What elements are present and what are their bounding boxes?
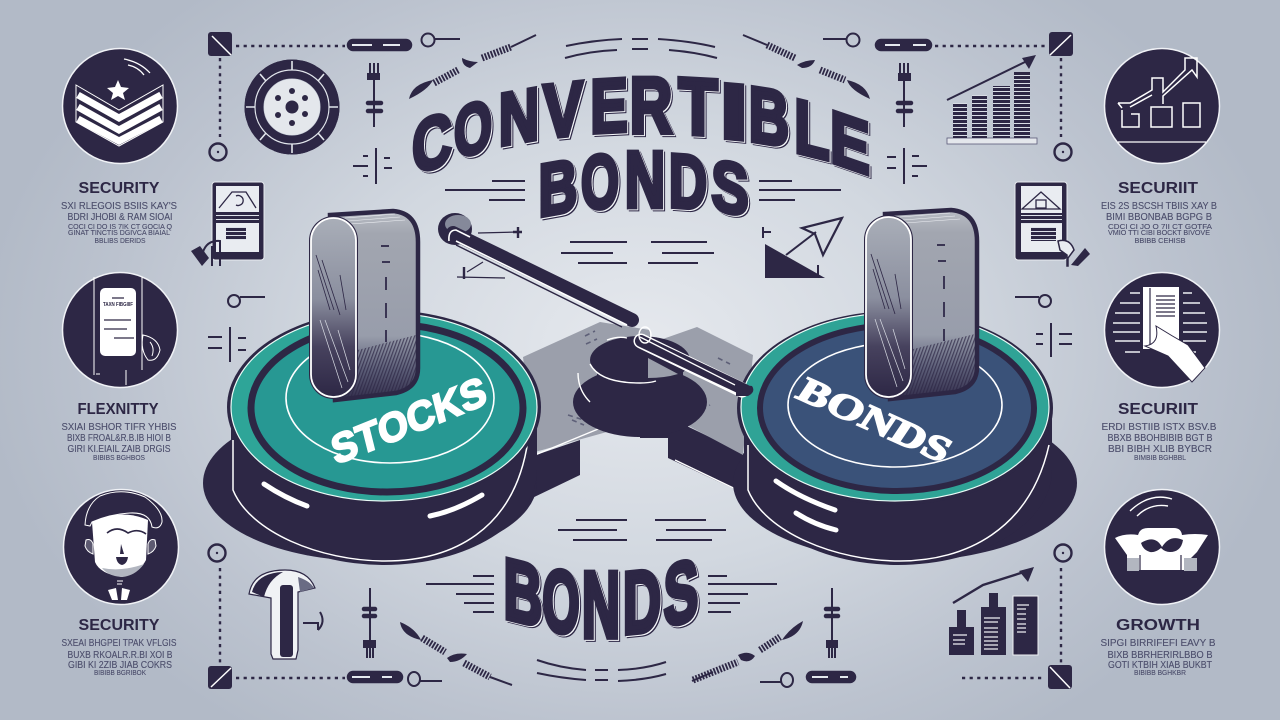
- label and text: left 2: SXIAI BSHOR TIFR YHBIS: [62, 422, 177, 433]
- title: CONVERTIBLE: L: [794, 84, 830, 177]
- capsule: right: [864, 210, 977, 399]
- badge: smiling person: [64, 490, 178, 604]
- tablet icon right: [1015, 182, 1090, 266]
- label and text: right 3: SIPGI BIRRIFEFI EAVY B: [1100, 638, 1216, 649]
- label and text: left 3: SXEAI BHGPEI TPAK VFLGIS: [62, 638, 177, 649]
- title: CONVERTIBLE: V: [543, 65, 583, 155]
- platform: bonds: [733, 311, 1077, 565]
- platform: stocks: [203, 310, 541, 565]
- label and text: left 2: FLEXNITTY: [78, 401, 159, 418]
- frame: dotted corners and connectors: [208, 32, 1073, 689]
- platform shadow: [203, 405, 537, 561]
- arrow on wedge icon: [763, 218, 842, 278]
- label and text: right 2: [1102, 401, 1217, 462]
- decorative ornaments: bars, pins, crosses: [208, 34, 1072, 687]
- label and text: right 2: BBXB BBOHBIBIB BGT B: [1108, 433, 1213, 444]
- title: BONDS: B: [539, 143, 577, 233]
- title: BONDS: N: [625, 134, 665, 225]
- label and text: right 3: GOTI KTBIH XIAB BUKBT: [1108, 660, 1212, 671]
- gear icon: [246, 60, 338, 154]
- label and text: left 1: BBLIBS DERIDS: [94, 236, 146, 245]
- bar chart top right: [947, 55, 1037, 144]
- label and text: right 1: [1101, 180, 1217, 245]
- arch column icon: [249, 570, 323, 659]
- title: CONVERTIBLE: B: [749, 71, 789, 164]
- title: CONVERTIBLE: O: [454, 85, 492, 174]
- panel: left plate: [523, 322, 650, 500]
- title: CONVERTIBLE: N: [499, 71, 539, 161]
- label and text: right 2: SECURIIT: [1118, 401, 1198, 418]
- badge: rising steps: [1104, 48, 1220, 164]
- label and text: left 3: BIBIBB BGRIBOK: [94, 668, 146, 677]
- label and text: right 2: BBI BIBH XLIB BYBCR: [1108, 444, 1212, 455]
- label and text: right 1: BIMI BBONBAB BGPG B: [1106, 212, 1212, 223]
- bonds disc: [737, 311, 1053, 505]
- label and text: right 3: BIXB BBRHERIRLBBO B: [1108, 650, 1213, 661]
- footer word: BONDS: O: [542, 552, 580, 654]
- badge: bow and seat: [1104, 490, 1220, 604]
- footer word: BONDS: [504, 540, 698, 658]
- label and text: left 1: BDRI JHOBI & RAM SIOAI: [68, 212, 172, 223]
- badge: chevrons: [62, 48, 178, 164]
- bar chart bottom right: [949, 567, 1038, 655]
- badge: paper in hand: [1104, 272, 1220, 388]
- ornaments: springs and leaves: [400, 35, 870, 685]
- cylinder body: [231, 410, 537, 565]
- label and text: left 3: [62, 617, 177, 677]
- label and text: left 3: GIBI KI 2ZIB JIAB COKRS: [68, 660, 172, 671]
- label and text: left 3: SECURITY: [79, 617, 160, 634]
- title: CONVERTIBLE: R: [630, 60, 672, 150]
- title: BONDS: D: [669, 138, 707, 225]
- label and text: left 2: BIBIBS BGHBOS: [93, 453, 145, 462]
- label: STOCKS: STOCKS: [327, 368, 491, 474]
- platform shadow: [733, 405, 1077, 561]
- label and text: left 1: SXI RLEGOIS BSIIS KAY'S: [61, 201, 177, 212]
- title: BONDS: S: [711, 144, 749, 231]
- label and text: left 1: SECURITY: [79, 180, 160, 197]
- label and text: left 1: GINAT TINCTIS DGIVCA BIAIAL: [68, 230, 170, 237]
- footer word: BONDS: N: [582, 553, 620, 658]
- label and text: right 1: SECURIIT: [1118, 180, 1198, 197]
- label and text: right 2: BIMBIB BGHBBL: [1134, 453, 1186, 462]
- label and text: right 1: CDCI CI JO O 7II CT GOTFA: [1108, 222, 1212, 231]
- label and text: right 1: BBIBB CEHISB: [1134, 236, 1186, 245]
- badge: document in hand: TAXN FIBGIIIF: [103, 302, 134, 308]
- label: BONDS: BONDS: [789, 370, 960, 470]
- label and text: left 1: [61, 180, 177, 245]
- label and text: left 3: BUXB RKOALR.R.BI XOI B: [68, 650, 173, 661]
- stocks disc: [227, 310, 541, 504]
- footer word: BONDS: B: [504, 540, 542, 646]
- badge: document in hand: [62, 272, 178, 388]
- label and text: right 3: BIBIBB BGHKBR: [1134, 668, 1187, 677]
- title: BONDS: [539, 134, 749, 233]
- title: CONVERTIBLE: [412, 60, 870, 191]
- label and text: right 1: VMIO TTI CIBI BOCKT BIVOVE: [1108, 230, 1210, 237]
- panel: right plate: [640, 327, 753, 495]
- label and text: right 3: GROWTH: [1116, 617, 1200, 634]
- footer word: BONDS: D: [623, 551, 661, 653]
- label and text: left 2: BIXB FROAL&R.B.IB HIOI B: [67, 433, 171, 444]
- tablet icon left: [191, 182, 264, 266]
- title: CONVERTIBLE: T: [678, 61, 718, 153]
- title: CONVERTIBLE: E: [830, 95, 870, 191]
- title: CONVERTIBLE: E: [590, 64, 628, 150]
- label and text: right 1: EIS 2S BSCSH TBIIS XAY B: [1101, 201, 1217, 212]
- capsule: left: [309, 211, 418, 400]
- label and text: left 2: [62, 401, 177, 462]
- label and text: right 2: ERDI BSTIIB ISTX BSV.B: [1102, 422, 1217, 433]
- title: CONVERTIBLE: I: [720, 68, 748, 157]
- footer word: BONDS: S: [664, 541, 698, 646]
- hub: [573, 336, 707, 437]
- label and text: left 1: COCI CI DO IS 7IK CT GOCIA Q: [68, 222, 172, 231]
- lever: [438, 213, 753, 396]
- label and text: right 3: [1100, 617, 1216, 677]
- title: CONVERTIBLE: C: [412, 96, 452, 191]
- title: BONDS: O: [581, 138, 619, 225]
- cylinder body: [744, 410, 1052, 565]
- label and text: left 2: GIRI KI.EIAIL ZAIB DRGIS: [68, 444, 171, 455]
